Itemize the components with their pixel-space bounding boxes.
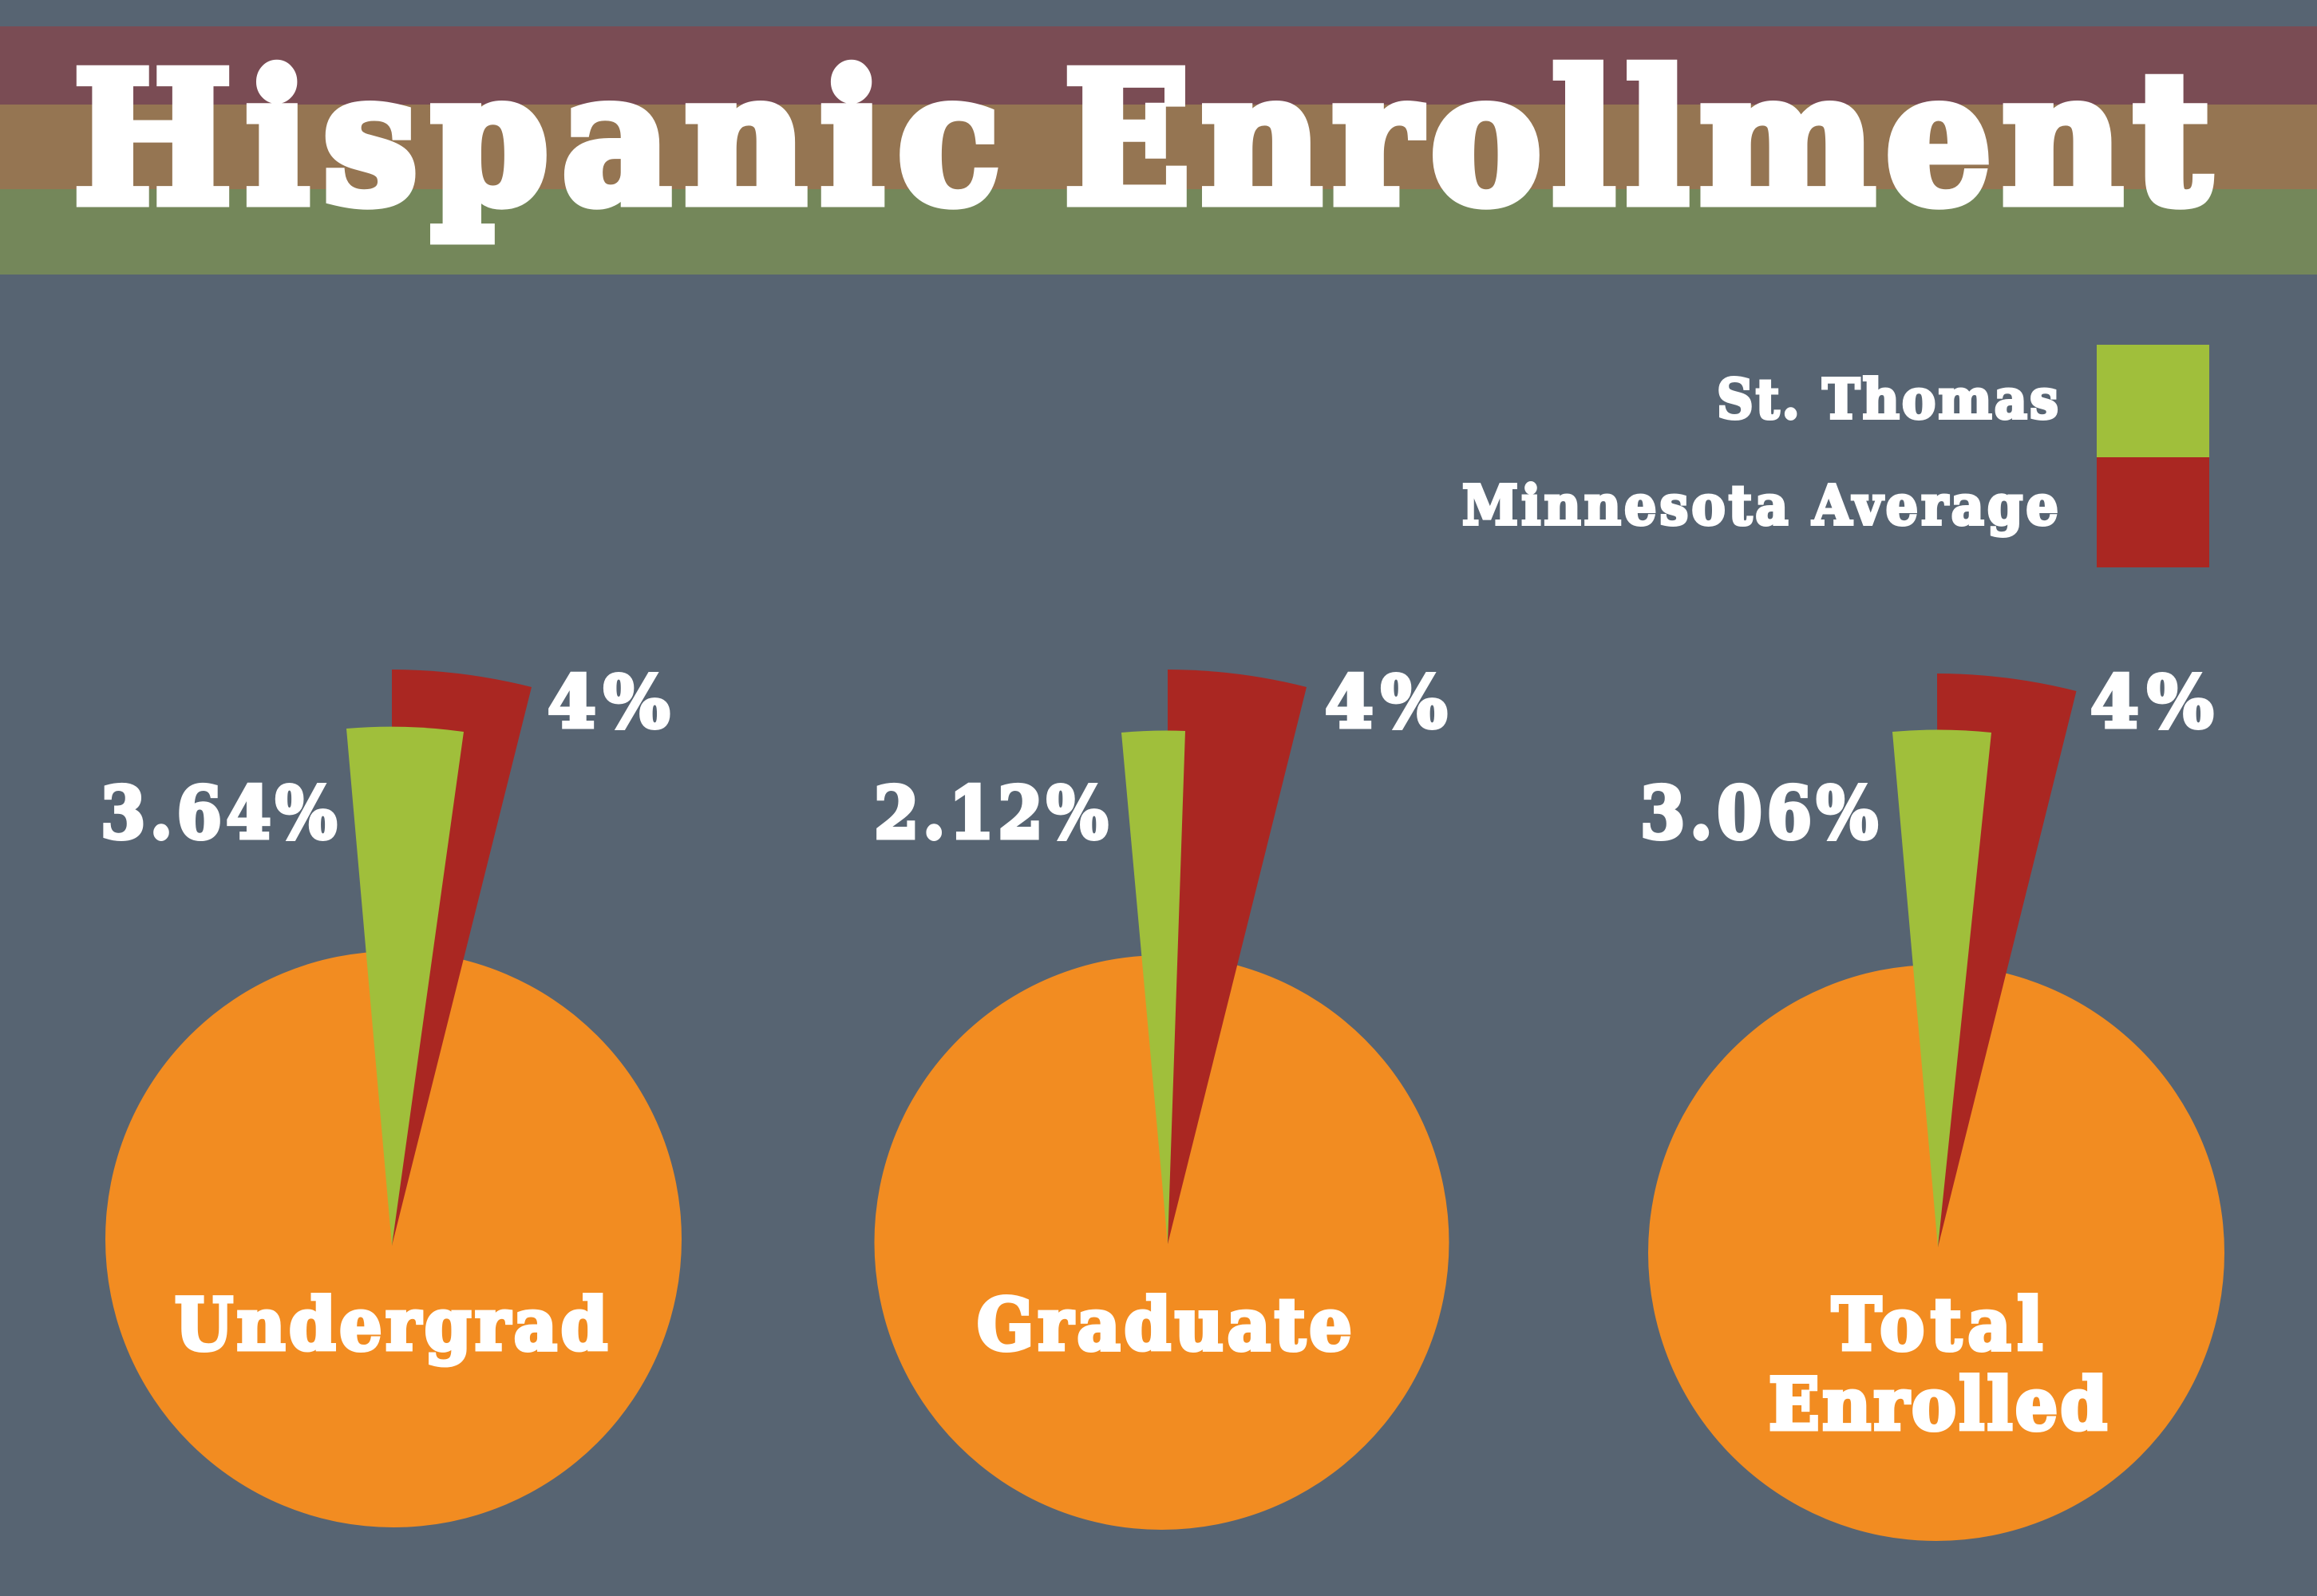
title xyxy=(73,34,2210,245)
label: Undergrad: Undergrad xyxy=(175,1282,607,1367)
panel: total enrolled pie xyxy=(1640,660,2224,1541)
label: Total Enrolled: Enrolled xyxy=(1769,1362,2107,1447)
wedge: Minnesota average 4% xyxy=(1937,674,2077,1247)
title: Hispanic xyxy=(73,34,1000,245)
title banner xyxy=(0,26,2317,275)
legend label: Minnesota Average: Minnesota Average xyxy=(1462,474,2058,538)
title: Enrollment xyxy=(1064,34,2210,245)
value: 4%: 4% xyxy=(548,660,670,744)
label: Total Enrolled xyxy=(1769,1282,2107,1447)
legend swatch: Minnesota Average xyxy=(2097,457,2209,567)
value: 4%: 4% xyxy=(1325,660,1447,744)
legend swatch: St. Thomas xyxy=(2097,345,2209,457)
legend xyxy=(1462,345,2209,567)
panel: undergrad pie xyxy=(101,660,682,1527)
panel: graduate pie xyxy=(874,660,1449,1530)
value: 4%: 4% xyxy=(2090,660,2213,744)
label: Total Enrolled: Total xyxy=(1832,1282,2042,1367)
wedge: St. Thomas 3.64% xyxy=(346,727,464,1246)
value: 3.06%: 3.06% xyxy=(1640,772,1878,855)
value: 3.64%: 3.64% xyxy=(101,772,337,855)
wedge: Minnesota average 4% xyxy=(1168,670,1307,1244)
pie circle xyxy=(875,955,1449,1530)
pie circle xyxy=(1648,965,2224,1541)
wedge: St. Thomas 3.06% xyxy=(1892,730,1991,1247)
pie circle xyxy=(105,951,682,1527)
label: Graduate: Graduate xyxy=(977,1282,1352,1367)
value: 2.12%: 2.12% xyxy=(874,772,1108,855)
legend label: St. Thomas: St. Thomas xyxy=(1717,368,2058,432)
wedge: St. Thomas 2.12% xyxy=(1121,731,1185,1244)
wedge: Minnesota average 4% xyxy=(392,670,532,1246)
